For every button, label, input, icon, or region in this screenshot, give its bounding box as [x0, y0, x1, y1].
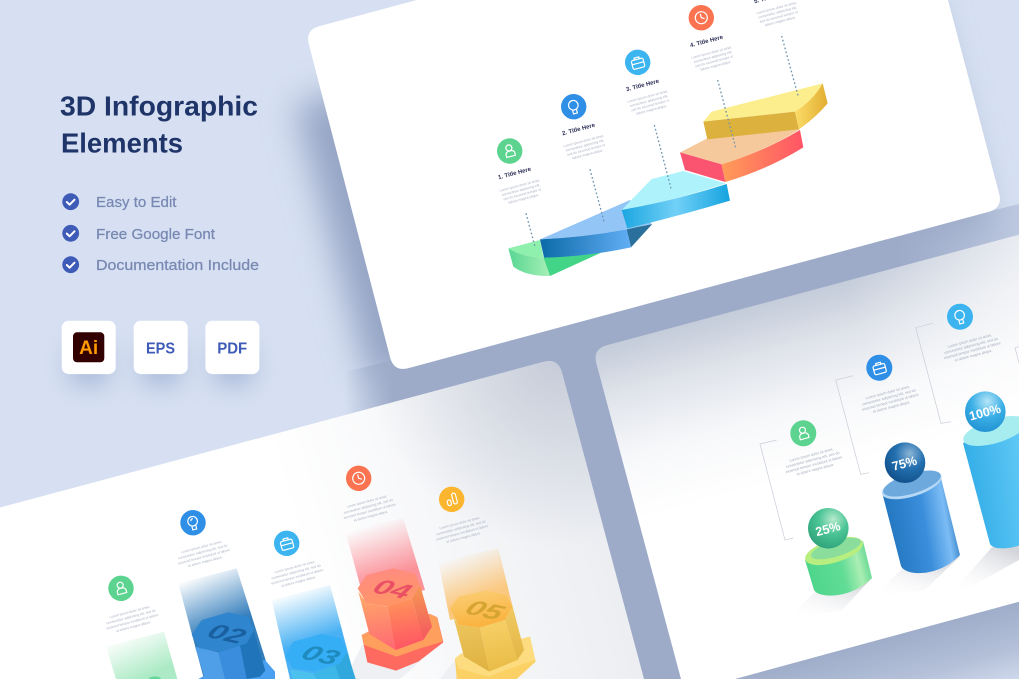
feature: Documentation Include: Documentation Include: [96, 257, 259, 274]
cylinder 75%: [879, 442, 960, 573]
step 5 label: Lorem ipsum dolor sit amet,: [756, 1, 797, 15]
text block 25: consectetur adipiscing elit, sed do: [785, 451, 840, 469]
text block 3: et dolore magna aliqua.: [281, 575, 316, 588]
step 4 label: Lorem ipsum dolor sit amet,: [691, 45, 733, 60]
step 2 label: consectetur adipiscing elit,: [565, 138, 605, 153]
column 05: [438, 548, 536, 679]
step 3 label: sed do eiusmod tempor ut: [631, 98, 670, 112]
step 1 label: sed do eiusmod tempor ut: [503, 187, 542, 201]
text block 4: consectetur adipiscing elit, sed do: [343, 498, 394, 515]
text block 5: Lorem ipsum dolor sit amet,: [439, 516, 481, 530]
step 1 green: [508, 220, 652, 276]
column 01: [106, 632, 177, 679]
icon: person: [105, 573, 137, 604]
step 2 blue: [540, 200, 652, 258]
step 4 label: [686, 2, 736, 73]
text block 5: eiusmod tempor incididunt ut labore: [436, 524, 489, 542]
step 3 label: consectetur adipiscing elit,: [629, 94, 669, 108]
icon: bulb: [944, 301, 976, 333]
text block 4: et dolore magna aliqua.: [353, 509, 389, 523]
panel: top slide: [308, 0, 1000, 369]
step 5 label: labore magna aliqua: [765, 15, 795, 27]
step 3 label: labore magna aliqua: [636, 104, 667, 116]
text block 100: [941, 332, 1002, 365]
icon: briefcase: [863, 352, 895, 384]
step 5 label: [754, 0, 801, 29]
panel: right slide: [596, 235, 1019, 679]
feature: Free Google Font: Free Google Font: [96, 226, 216, 243]
step 1 label: labore magna aliqua: [508, 193, 539, 205]
step 3 cyan: [622, 171, 730, 228]
panel: bottom left slide: [0, 361, 644, 679]
text block 4: eiusmod tempor incididunt ut labore: [343, 502, 396, 520]
step 4 label: labore magna aliqua: [700, 60, 731, 72]
text block 2: eiusmod tempor incididunt ut labore: [178, 548, 231, 566]
text block 25: Lorem ipsum dolor sit amet,: [789, 447, 834, 463]
text block 75: eiusmod tempor incididunt ut labore: [862, 393, 919, 412]
step 2 label: Lorem ipsum dolor sit amet,: [563, 134, 605, 148]
text block 1: Lorem ipsum dolor sit amet,: [109, 605, 151, 619]
title: [60, 90, 258, 158]
step 1 label: [494, 135, 544, 206]
text block 75: [859, 383, 920, 417]
text block 4: Lorem ipsum dolor sit amet,: [346, 494, 388, 509]
chart: stair steps: [508, 36, 828, 276]
text block 75: Lorem ipsum dolor sit amet,: [865, 385, 910, 400]
step 2 label: [558, 91, 608, 162]
cylinder 25%: 25%: [814, 519, 842, 539]
text block 1: et dolore magna aliqua.: [116, 620, 151, 633]
column 03: [272, 585, 356, 679]
title: Elements: [61, 128, 183, 158]
step 4 red: [680, 129, 803, 182]
brackets: [760, 323, 1019, 540]
badge: Ai: Ai: [79, 338, 98, 359]
step 4 label: 4. Title Here: [690, 35, 725, 49]
step 2 label: sed do eiusmod tempor ut: [567, 143, 606, 157]
text block 3: eiusmod tempor incididunt ut labore: [271, 568, 324, 586]
icon: bulb: [177, 507, 209, 538]
format badges: [62, 321, 259, 386]
icon: person: [787, 417, 819, 449]
text block 5: [433, 514, 490, 546]
text block 25: eiusmod tempor incididunt ut labore: [785, 455, 843, 474]
cylinder 75%: 75%: [890, 454, 918, 474]
badge: Ai: [62, 321, 116, 374]
text block 75: consectetur adipiscing elit, sed do: [862, 388, 916, 406]
text block 2: [175, 538, 232, 570]
badge: PDF: [205, 321, 259, 374]
text block 4: [341, 493, 397, 525]
floor shadows: [345, 635, 480, 679]
text block 2: Lorem ipsum dolor sit amet,: [181, 540, 222, 554]
text block 100: consectetur adipiscing elit, sed do: [944, 337, 998, 355]
feature: Easy to Edit: Easy to Edit: [96, 194, 177, 211]
text block 3: consectetur adipiscing elit, sed do: [271, 563, 321, 580]
text block 2: et dolore magna aliqua.: [188, 555, 223, 568]
text block 2: consectetur adipiscing elit, sed do: [178, 543, 228, 560]
cylinder 100%: [960, 391, 1019, 548]
title: 3D Infographic: [60, 90, 258, 122]
text block 100: eiusmod tempor incididunt ut labore: [944, 341, 1001, 360]
text block 25: [783, 446, 844, 479]
text block 100: Lorem ipsum dolor sit amet,: [947, 333, 992, 349]
text block 5: et dolore magna aliqua.: [446, 531, 481, 544]
icon: briefcase: [271, 528, 302, 559]
icon: bars: [436, 484, 467, 515]
text block 1: eiusmod tempor incididunt ut labore: [106, 613, 159, 631]
step 1 label: Lorem ipsum dolor sit amet,: [499, 178, 541, 193]
text block 25: et dolore magna aliqua.: [796, 463, 834, 476]
step 3 label: 3. Title Here: [626, 79, 661, 93]
column 04: 04: [368, 574, 417, 604]
step 3 label: [622, 47, 672, 117]
step 5 yellow: [703, 83, 828, 139]
step 5 label: consectetur adipiscing elit,: [758, 5, 797, 20]
badge: EPS: [134, 321, 188, 374]
step 2 label: labore magna aliqua: [572, 148, 603, 160]
column 03: 03: [297, 640, 346, 670]
floor shadows: [785, 545, 1019, 620]
feature: Easy to Edit: [62, 193, 177, 211]
column 02: [178, 568, 275, 679]
left text column: [60, 90, 259, 274]
step 1 label: 1. Title Here: [498, 167, 533, 181]
badge: EPS: EPS: [146, 340, 175, 357]
step 2 label: 2. Title Here: [562, 123, 597, 137]
step 4 label: consectetur adipiscing elit,: [693, 50, 733, 64]
text block 75: et dolore magna aliqua.: [872, 400, 911, 414]
step 4 label: sed do eiusmod tempor ut: [695, 54, 734, 68]
text block 5: consectetur adipiscing elit, sed do: [436, 519, 486, 536]
step 5 label: sed do eiusmod tempor ut: [759, 10, 798, 24]
dashed leaders: [526, 36, 798, 247]
text block 3: [268, 558, 325, 590]
text block 1: consectetur adipiscing elit, sed do: [106, 608, 156, 625]
panel shadows: [295, 0, 1019, 679]
text block 1: [103, 603, 160, 635]
column 02: 02: [203, 619, 252, 648]
text block 100: et dolore magna aliqua.: [954, 349, 993, 362]
text block 3: Lorem ipsum dolor sit amet,: [274, 560, 316, 574]
column 04: [345, 518, 443, 671]
cylinder 100%: 100%: [968, 402, 1002, 424]
chart: octagon columns: [106, 518, 536, 679]
badge: PDF: PDF: [217, 340, 247, 357]
column 05: 05: [461, 595, 510, 625]
cylinder 25%: [802, 508, 872, 596]
step 3 label: Lorem ipsum dolor sit amet,: [627, 89, 669, 104]
step 1 label: consectetur adipiscing elit,: [501, 183, 541, 197]
icon: clock: [343, 463, 374, 494]
